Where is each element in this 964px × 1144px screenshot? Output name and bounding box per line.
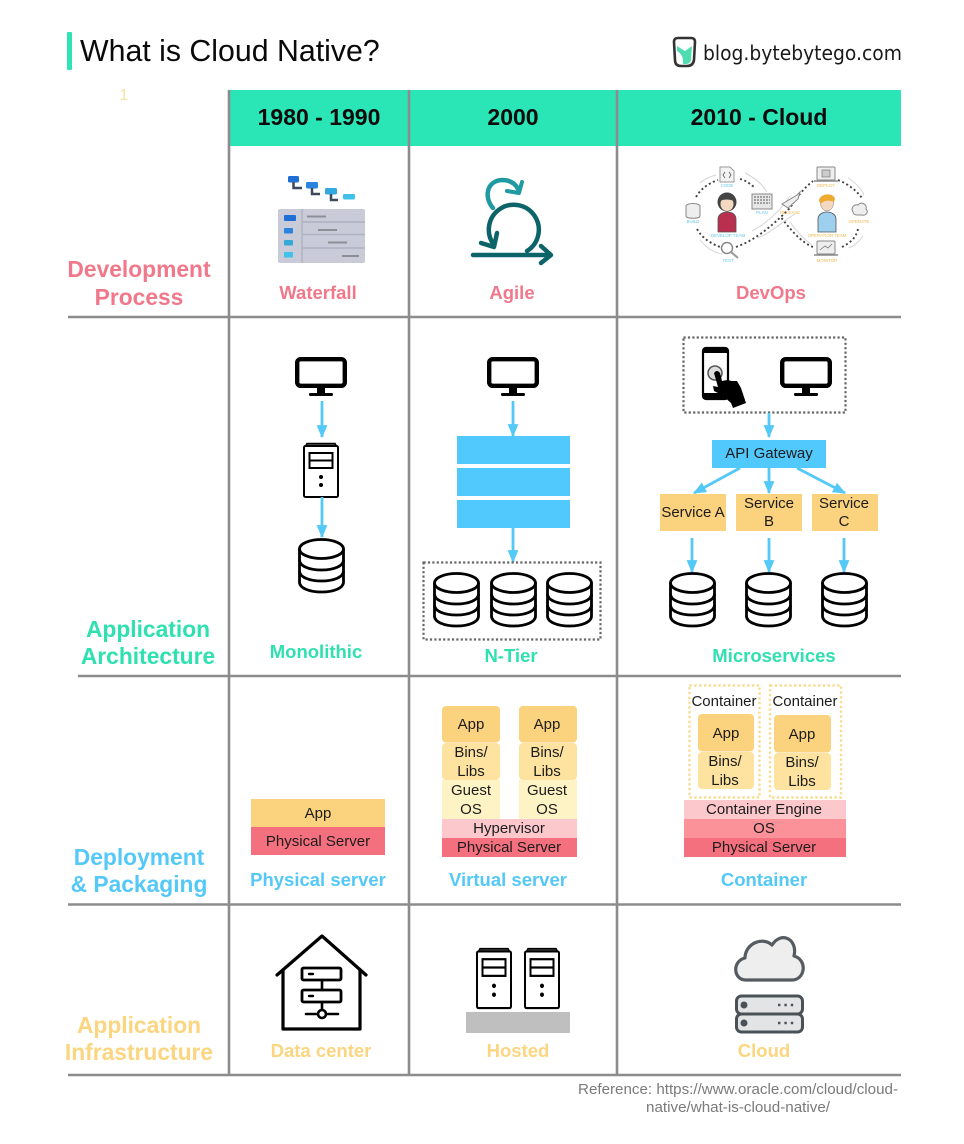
stack: virtual server: Bins/ <box>530 744 564 761</box>
label: container: Container <box>721 869 807 890</box>
row label: application architecture: Architecture <box>81 643 215 669</box>
diagram: microservices: Service A <box>661 504 725 521</box>
row label: application infrastructure <box>65 1012 213 1065</box>
stack: container: Container <box>691 693 757 710</box>
icon: devops infinity loop: DEPLOY <box>817 183 835 188</box>
header band <box>229 90 901 146</box>
row label: application architecture: Application <box>86 616 210 642</box>
brand logo and url: blog.bytebytego.com <box>703 41 902 65</box>
diagram: monolithic <box>297 359 345 592</box>
label: waterfall: Waterfall <box>279 282 357 303</box>
stack: container: App <box>789 726 815 743</box>
stack: virtual server <box>442 706 577 857</box>
label: data center: Data center <box>271 1040 371 1061</box>
diagram: microservices: C <box>839 513 850 530</box>
title: What is Cloud Native? <box>80 35 380 68</box>
stack: container: Libs <box>711 772 739 789</box>
stack: container: Container <box>772 693 838 710</box>
diagram: microservices <box>660 338 878 626</box>
icon: hosted servers <box>466 949 570 1033</box>
icon: data center <box>277 936 366 1029</box>
stray footnote digit: 1 <box>120 87 129 104</box>
icon: waterfall <box>278 176 365 263</box>
row label: development process: Development <box>67 256 211 282</box>
row label: deployment and packaging: & Packaging <box>71 871 207 897</box>
icon: devops infinity loop: TEST <box>722 258 734 263</box>
stack: virtual server: OS <box>536 801 558 818</box>
stack: virtual server: Libs <box>457 763 485 780</box>
diagram: microservices: Service <box>744 495 794 512</box>
stack: virtual server: Physical Server <box>457 839 561 856</box>
stack: virtual server: Bins/ <box>454 744 488 761</box>
stack: physical server: App <box>305 805 331 822</box>
stack: container: Libs <box>788 773 816 790</box>
label: monolithic: Monolithic <box>270 641 362 662</box>
label: n-tier: N-Tier <box>484 645 538 666</box>
row label: development process: Process <box>95 284 183 310</box>
icon: devops infinity loop: RELEASE <box>780 210 800 215</box>
stack: physical server <box>251 799 385 855</box>
label: cloud: Cloud <box>738 1040 790 1061</box>
icon: devops infinity loop: OPERATE <box>849 219 869 224</box>
icon: devops infinity loop: BUILD <box>687 219 699 224</box>
stack: container: Bins/ <box>708 753 742 770</box>
stack: virtual server: App <box>534 716 560 733</box>
stack: virtual server: OS <box>460 801 482 818</box>
stack: container: Container Engine <box>706 801 822 818</box>
icon: agile loop <box>473 180 551 263</box>
label: virtual server: Virtual server <box>449 869 567 890</box>
stack: container: App <box>713 725 739 742</box>
label: physical server: Physical server <box>250 869 386 890</box>
stack: virtual server: Guest <box>451 782 492 799</box>
row label: application architecture <box>81 616 215 669</box>
label: devops: DevOps <box>736 282 806 303</box>
icon: devops infinity loop: OPERATION TEAM <box>808 233 847 238</box>
diagram: microservices: B <box>764 513 774 530</box>
stack: container: OS <box>753 820 775 837</box>
row label: application infrastructure: Infrastructure <box>65 1039 213 1065</box>
icon: devops infinity loop: MONITOR <box>817 258 837 263</box>
icon: devops infinity loop: CODE <box>721 183 733 188</box>
icon: cloud and servers <box>736 938 803 1032</box>
header band: 2010 - Cloud <box>691 104 827 130</box>
icon: devops infinity loop: PLAN <box>756 210 768 215</box>
row label: development process <box>67 256 211 310</box>
stack: virtual server: Hypervisor <box>473 820 545 837</box>
header band: 1980 - 1990 <box>258 104 380 130</box>
reference note: native/what-is-cloud-native/ <box>646 1099 831 1116</box>
stack: virtual server: Libs <box>533 763 561 780</box>
stack: virtual server: Guest <box>527 782 568 799</box>
label: agile: Agile <box>489 282 535 303</box>
stack: container <box>684 686 846 857</box>
stack: container: Bins/ <box>785 754 820 771</box>
reference note <box>578 1081 898 1116</box>
diagram: n-tier <box>424 359 600 640</box>
row label: deployment and packaging <box>71 844 207 897</box>
icon: devops infinity loop <box>686 167 869 263</box>
diagram: microservices: API Gateway <box>725 445 813 462</box>
row label: deployment and packaging: Deployment <box>74 844 205 870</box>
label: microservices: Microservices <box>712 645 836 666</box>
icon: devops infinity loop: DEVELOP TEAM <box>711 233 745 238</box>
label: hosted: Hosted <box>487 1040 549 1061</box>
stack: virtual server: App <box>458 716 484 733</box>
row label: application infrastructure: Application <box>77 1012 201 1038</box>
diagram: microservices: Service <box>819 495 869 512</box>
stack: physical server: Physical Server <box>266 833 370 850</box>
reference note: Reference: https://www.oracle.com/cloud/cloud- <box>578 1081 898 1098</box>
stack: container: Physical Server <box>712 839 816 856</box>
header band: 2000 <box>487 104 539 130</box>
